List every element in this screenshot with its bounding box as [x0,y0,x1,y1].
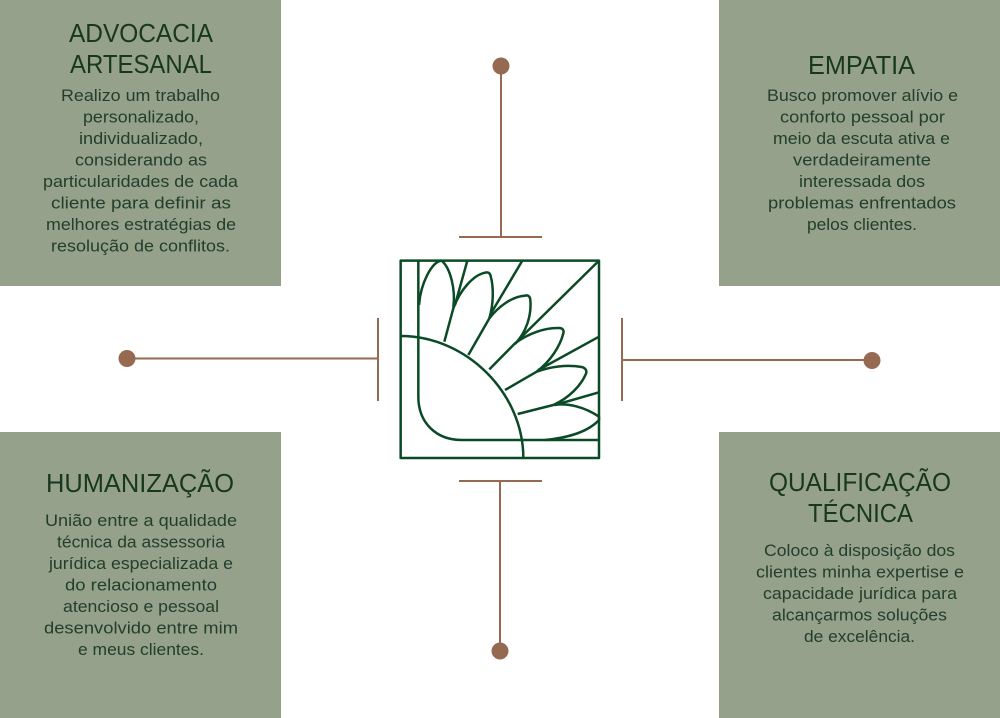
icon: sunflower logo [401,261,599,458]
text block: qualificação técnica: de excelência. [804,627,915,646]
text block: qualificação técnica: alcançarmos soluções [772,606,947,624]
connector: left [118,318,378,401]
connector: bottom [459,481,542,660]
connector: right [622,318,880,401]
text block: qualificação técnica: Coloco à disposição dos [764,541,955,560]
text block: humanização: e meus clientes. [78,640,204,659]
text block: empatia [767,86,958,234]
heading: qualificação técnica: TÉCNICA [808,499,913,528]
text block: advocacia artesanal: Realizo um trabalho [61,86,220,105]
text block: humanização: jurídica especializada e [48,554,233,573]
text block: advocacia artesanal: particularidades de cada [43,172,239,191]
text block: advocacia artesanal: personalizado, [83,108,199,126]
text block: humanização: atencioso e pessoal [63,597,219,616]
text block: empatia: conforto pessoal por [780,108,945,126]
text block: advocacia artesanal [43,86,239,256]
text block: humanização [44,511,238,659]
panel: advocacia artesanal [0,0,281,286]
text block: qualificação técnica: clientes minha expertise e [756,562,964,582]
text block: empatia: Busco promover alívio e [767,86,958,105]
text block: empatia: interessada dos [799,172,925,191]
text block: humanização: do relacionamento [65,576,217,594]
panel: humanização [0,432,281,718]
text block: humanização: União entre a qualidade [45,511,237,530]
heading: qualificação técnica: QUALIFICAÇÃO [769,468,951,497]
text block: humanização: técnica da assessoria [57,532,226,552]
text block: empatia: meio da escuta ativa e [773,129,950,148]
text block: qualificação técnica [756,541,964,646]
text block: advocacia artesanal: resolução de conflitos. [51,236,230,256]
panel: empatia [719,0,1000,286]
text block: advocacia artesanal: considerando as [75,150,207,170]
text block: advocacia artesanal: cliente para definir as [51,194,231,212]
text block: empatia: verdadeiramente [793,150,931,170]
panel: qualificação técnica [719,432,1000,718]
text block: empatia: problemas enfrentados [768,194,956,212]
heading: advocacia artesanal: ADVOCACIA [69,20,213,48]
text block: qualificação técnica: capacidade jurídica para [763,584,958,603]
text block: advocacia artesanal: individualizado, [79,129,203,148]
heading: qualificação técnica [769,468,951,528]
text block: humanização: desenvolvido entre mim [44,618,238,638]
heading: humanização: HUMANIZAÇÃO [46,469,234,498]
text block: advocacia artesanal: melhores estratégias de [46,215,236,234]
heading: advocacia artesanal [69,20,213,79]
heading: advocacia artesanal: ARTESANAL [70,51,212,79]
connector: top [459,58,542,237]
text block: empatia: pelos clientes. [807,215,917,234]
heading: empatia: EMPATIA [808,52,915,80]
